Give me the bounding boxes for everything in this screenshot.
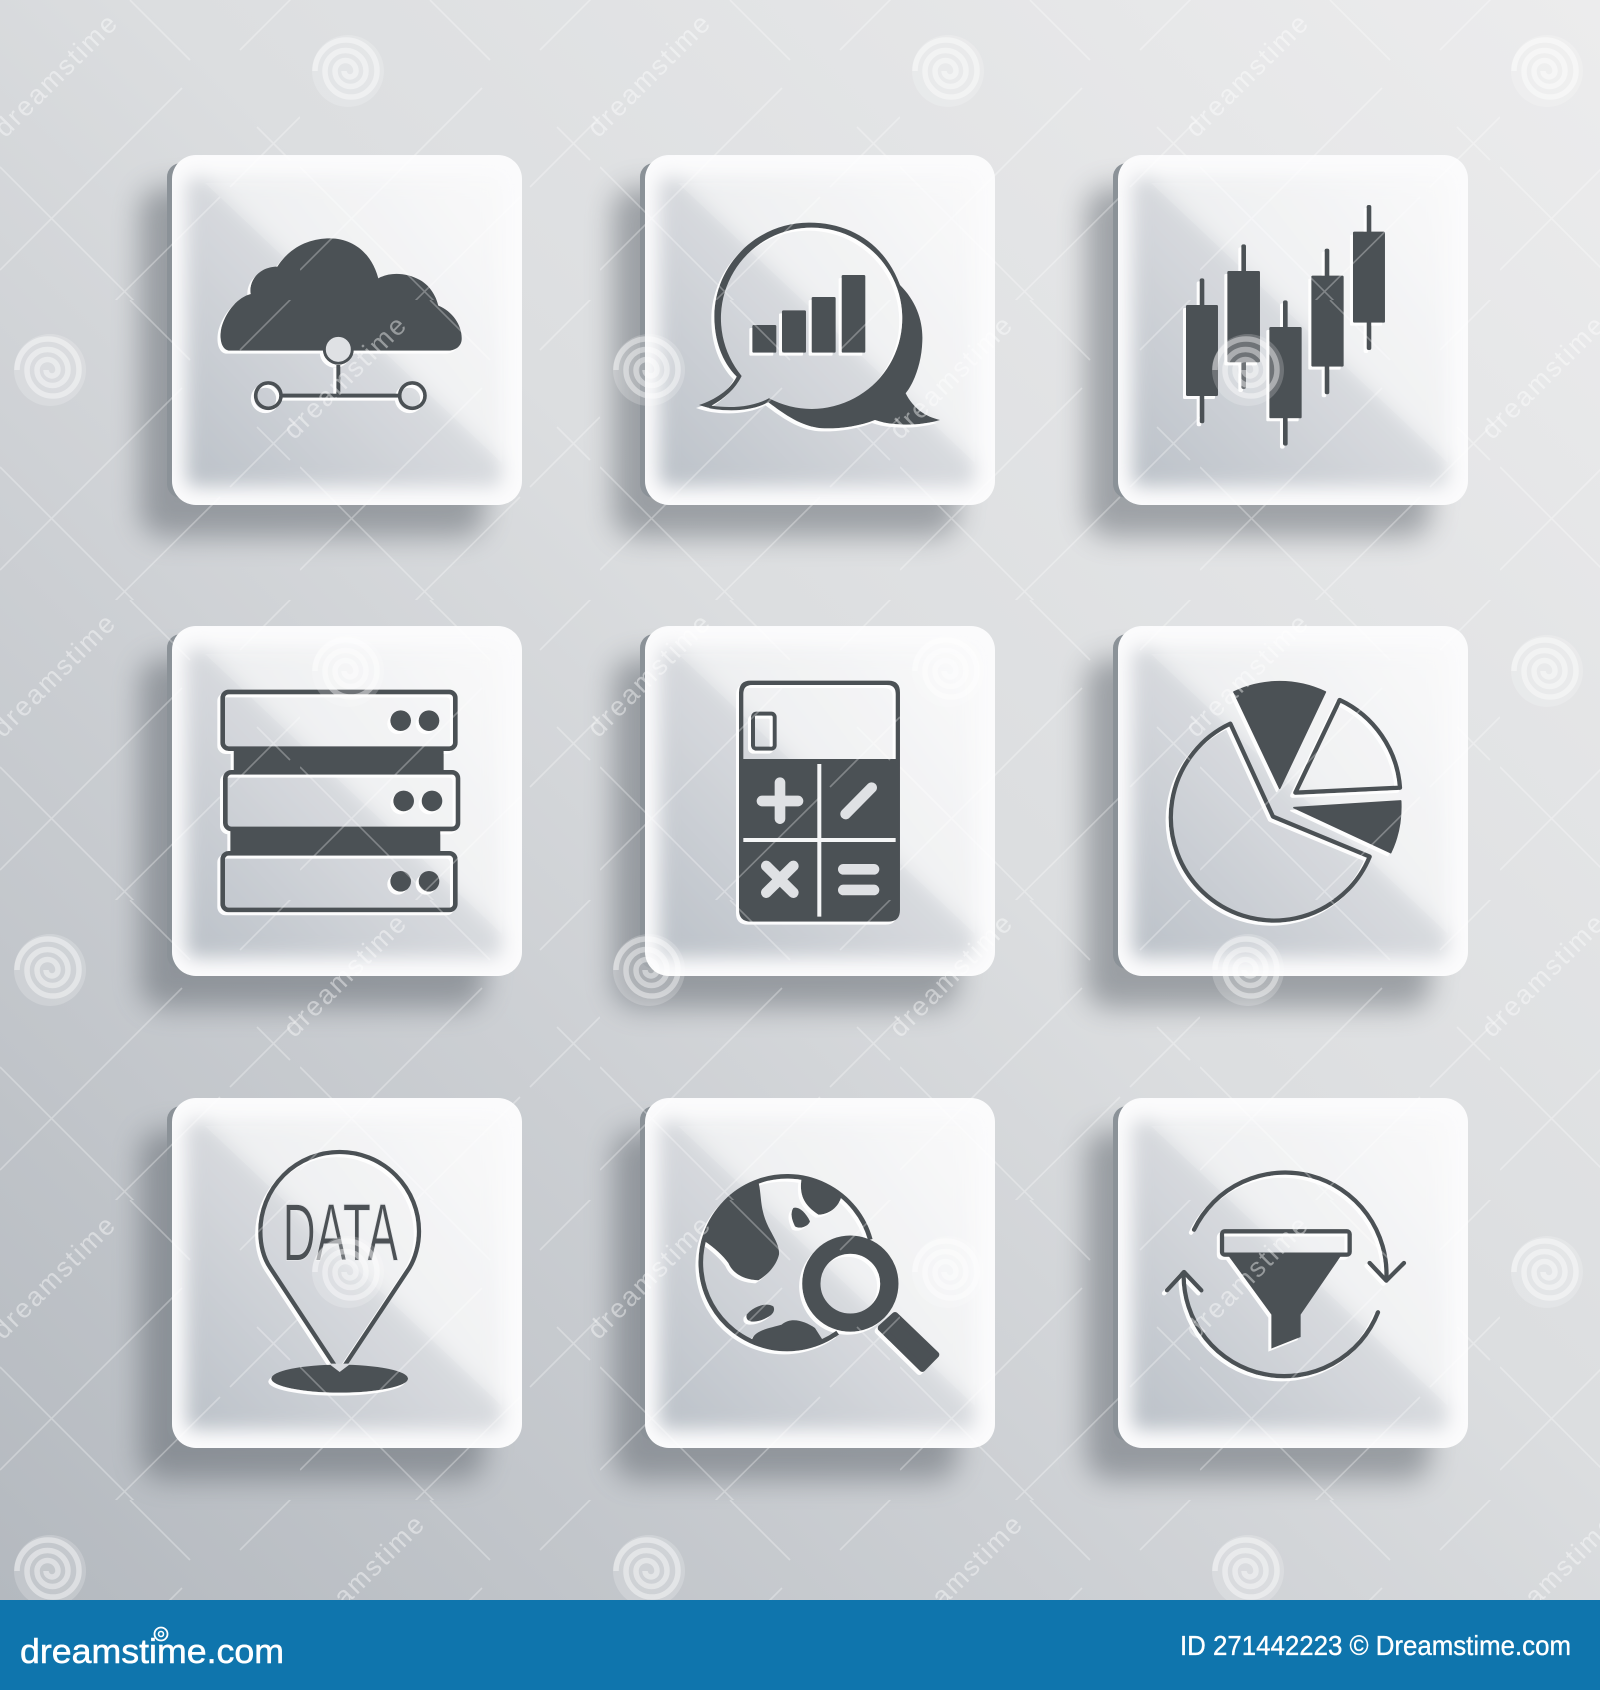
watermark layer: dreamstime [581,1210,716,1345]
icon: pie chart [1171,682,1401,921]
panel: globe search button [613,1098,995,1480]
icon: server rack [223,692,458,910]
icon: cloud network [220,238,462,408]
icon: globe with magnifier [701,1176,936,1369]
panel: calculator button [613,626,995,1008]
panel: funnel filter button [1086,1098,1468,1480]
panel: server rack button [140,626,522,1008]
watermark layer: dreamstime [277,908,412,1043]
footer banner [0,1600,1600,1690]
panel: cloud network button [140,155,522,537]
watermark layer: dreamstime [295,1509,430,1644]
watermark layer: dreamstime [883,310,1018,445]
pin label: DATA [283,1188,398,1279]
panel: pie chart button [1086,626,1468,1008]
watermark layer: dreamstime [1179,608,1314,743]
panel: candlestick chart button [1086,155,1468,537]
icon: speech bubble with bars [699,223,940,428]
watermark layer: dreamstime [1179,8,1314,143]
logo swirl icon [154,1628,168,1640]
logo text: dreamstime.com [20,1633,284,1671]
icon: candlestick chart [1186,205,1385,446]
panel: chat statistics button [613,155,995,537]
icon: data location pin [260,1152,419,1393]
watermark layer: dreamstime [893,1509,1028,1644]
panel: data location pin button [140,1098,522,1480]
watermark layer: dreamstime [1179,1210,1314,1345]
watermark layer: dreamstime [277,310,412,445]
icon: funnel with cycle arrows [1167,1173,1404,1376]
watermark layer: dreamstime [581,608,716,743]
watermark layer: dreamstime [883,908,1018,1043]
image id credit: ID 271442223 © Dreamstime.com [1180,1630,1571,1661]
icon: calculator [739,681,900,922]
watermark layer: dreamstime [581,8,716,143]
